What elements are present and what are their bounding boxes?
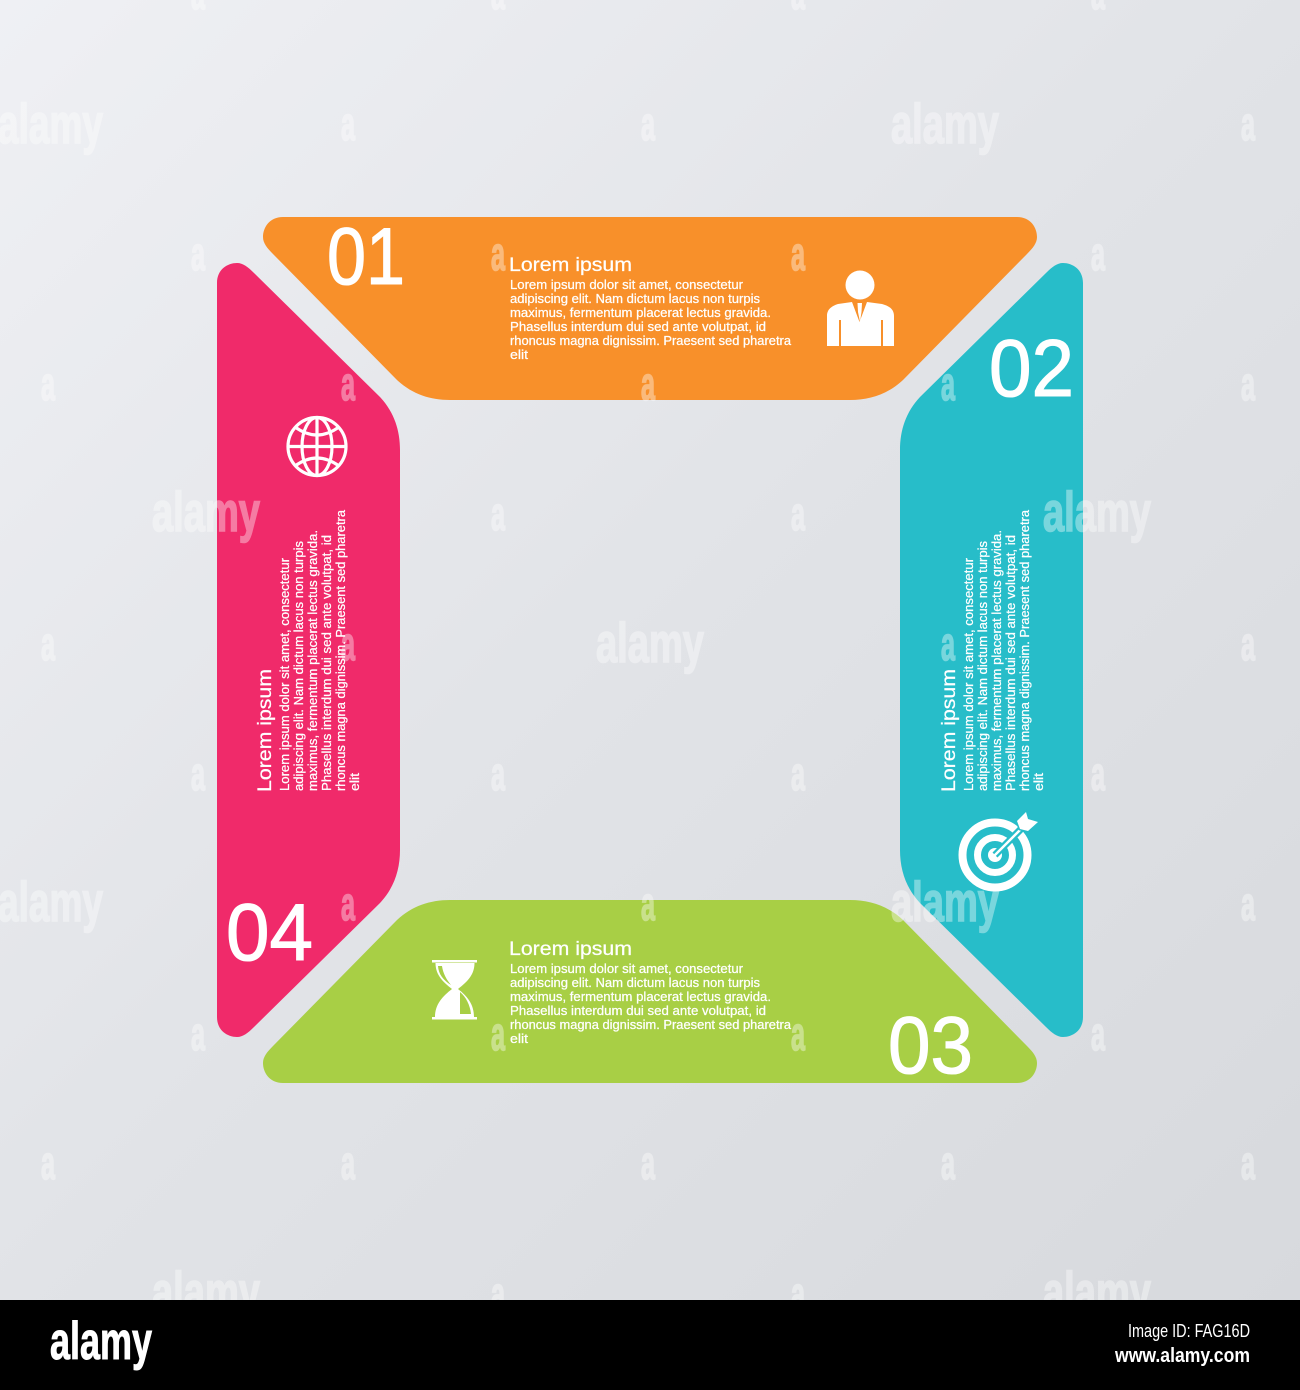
watermarks: a: [1241, 357, 1255, 410]
green shape: [263, 900, 1037, 1083]
text block 02: [938, 509, 1046, 792]
number 02: 02: [989, 324, 1074, 414]
text block 01: adipiscing elit. Nam dictum lacus non turpis: [510, 291, 760, 306]
watermarks: a: [1091, 1007, 1105, 1060]
watermarks: a: [641, 1136, 655, 1189]
text block 01: Lorem ipsum dolor sit amet, consectetur: [510, 277, 744, 292]
icon: hourglass: [432, 960, 477, 1020]
text block 04: adipiscing elit. Nam dictum lacus non turpis: [291, 541, 306, 791]
watermarks: a: [641, 97, 655, 150]
watermarks: a: [491, 487, 505, 540]
panel 02: teal: [900, 263, 1083, 1037]
text block 01: elit: [510, 347, 528, 362]
watermarks: alamy: [596, 611, 704, 674]
orange shape: [263, 217, 1037, 400]
watermarks: a: [1091, 747, 1105, 800]
watermarks: a: [791, 487, 805, 540]
text block 04: Lorem ipsum dolor sit amet, consectetur: [277, 557, 292, 791]
watermarks: a: [791, 1267, 805, 1320]
watermarks: a: [641, 877, 655, 930]
watermarks: a: [191, 1007, 205, 1060]
number 04: 04: [226, 888, 313, 978]
watermarks: a: [41, 617, 55, 670]
pink shape: [217, 263, 400, 1037]
panel 04: pink: [217, 263, 400, 1037]
watermarks: alamy: [0, 870, 103, 933]
watermarks: a: [941, 1136, 955, 1189]
website: www.alamy.com: [1114, 1345, 1250, 1367]
text block 04: rhoncus magna dignissim. Praesent sed pharetra: [333, 509, 348, 791]
watermarks: a: [1241, 97, 1255, 150]
watermarks: a: [341, 877, 355, 930]
watermarks: a: [41, 357, 55, 410]
text block 03: Phasellus interdum dui sed ante volutpat, id: [510, 1003, 766, 1018]
watermarks: a: [341, 97, 355, 150]
watermarks: alamy: [1043, 1260, 1151, 1323]
text block 04: Phasellus interdum dui sed ante volutpat, id: [319, 535, 334, 791]
watermarks: a: [341, 357, 355, 410]
number 01: 01: [327, 212, 405, 302]
text block 02: elit: [1031, 773, 1046, 791]
text block 04: maximus, fermentum placerat lectus gravida.: [305, 530, 320, 791]
watermarks: a: [491, 1267, 505, 1320]
text block 02: maximus, fermentum placerat lectus gravida.: [989, 530, 1004, 791]
text block 01: rhoncus magna dignissim. Praesent sed pharetra: [510, 333, 792, 348]
watermarks: a: [491, 1007, 505, 1060]
watermarks: a: [41, 1136, 55, 1189]
text block 01: [509, 254, 792, 362]
text block 01: Phasellus interdum dui sed ante volutpat, id: [510, 319, 766, 334]
watermarks: a: [791, 1007, 805, 1060]
watermarks: a: [941, 357, 955, 410]
text block 03: [509, 938, 792, 1046]
text block 04: [254, 509, 362, 792]
footer bar: [0, 1300, 1300, 1390]
panel 03: green: [263, 900, 1037, 1091]
text block 03: rhoncus magna dignissim. Praesent sed pharetra: [510, 1017, 792, 1032]
footer logo: alamy: [50, 1312, 152, 1371]
icon: globe: [288, 418, 346, 476]
text block 03: adipiscing elit. Nam dictum lacus non turpis: [510, 975, 760, 990]
text block 03: Lorem ipsum dolor sit amet, consectetur: [510, 961, 744, 976]
image id: Image ID: FAG16D: [1128, 1321, 1250, 1341]
watermarks: a: [1241, 617, 1255, 670]
text block 03: Lorem ipsum: [509, 938, 632, 960]
text block 04: Lorem ipsum: [254, 669, 276, 792]
text block 01: Lorem ipsum: [509, 254, 632, 276]
watermarks: alamy: [152, 1260, 260, 1323]
text block 03: elit: [510, 1031, 528, 1046]
panel 01: orange: [263, 212, 1037, 400]
text block 03: maximus, fermentum placerat lectus gravida.: [510, 989, 771, 1004]
watermarks: alamy: [0, 92, 103, 155]
watermarks: a: [191, 227, 205, 280]
watermarks: alamy: [891, 92, 999, 155]
teal shape: [900, 263, 1083, 1037]
text block 01: maximus, fermentum placerat lectus gravida.: [510, 305, 771, 320]
watermarks: a: [791, 747, 805, 800]
watermarks: a: [341, 617, 355, 670]
text block 02: adipiscing elit. Nam dictum lacus non turpis: [975, 541, 990, 791]
watermarks: a: [341, 1136, 355, 1189]
watermarks: a: [941, 617, 955, 670]
watermarks: alamy: [891, 870, 999, 933]
watermarks: alamy: [1043, 480, 1151, 543]
watermarks: alamy: [152, 480, 260, 543]
text block 02: Phasellus interdum dui sed ante volutpat, id: [1003, 535, 1018, 791]
icon: target with arrow: [962, 812, 1038, 888]
watermarks: a: [791, 227, 805, 280]
number 03: 03: [888, 1001, 973, 1091]
watermarks: a: [1241, 877, 1255, 930]
text block 02: Lorem ipsum dolor sit amet, consectetur: [961, 557, 976, 791]
text block 04: elit: [347, 773, 362, 791]
watermarks: a: [491, 227, 505, 280]
watermarks: a: [641, 357, 655, 410]
text block 02: Lorem ipsum: [938, 669, 960, 792]
watermarks: a: [1091, 227, 1105, 280]
text block 02: rhoncus magna dignissim. Praesent sed pharetra: [1017, 509, 1032, 791]
watermarks: a: [191, 747, 205, 800]
watermarks: a: [491, 747, 505, 800]
watermarks: a: [1241, 1136, 1255, 1189]
icon: businessman: [827, 270, 894, 346]
